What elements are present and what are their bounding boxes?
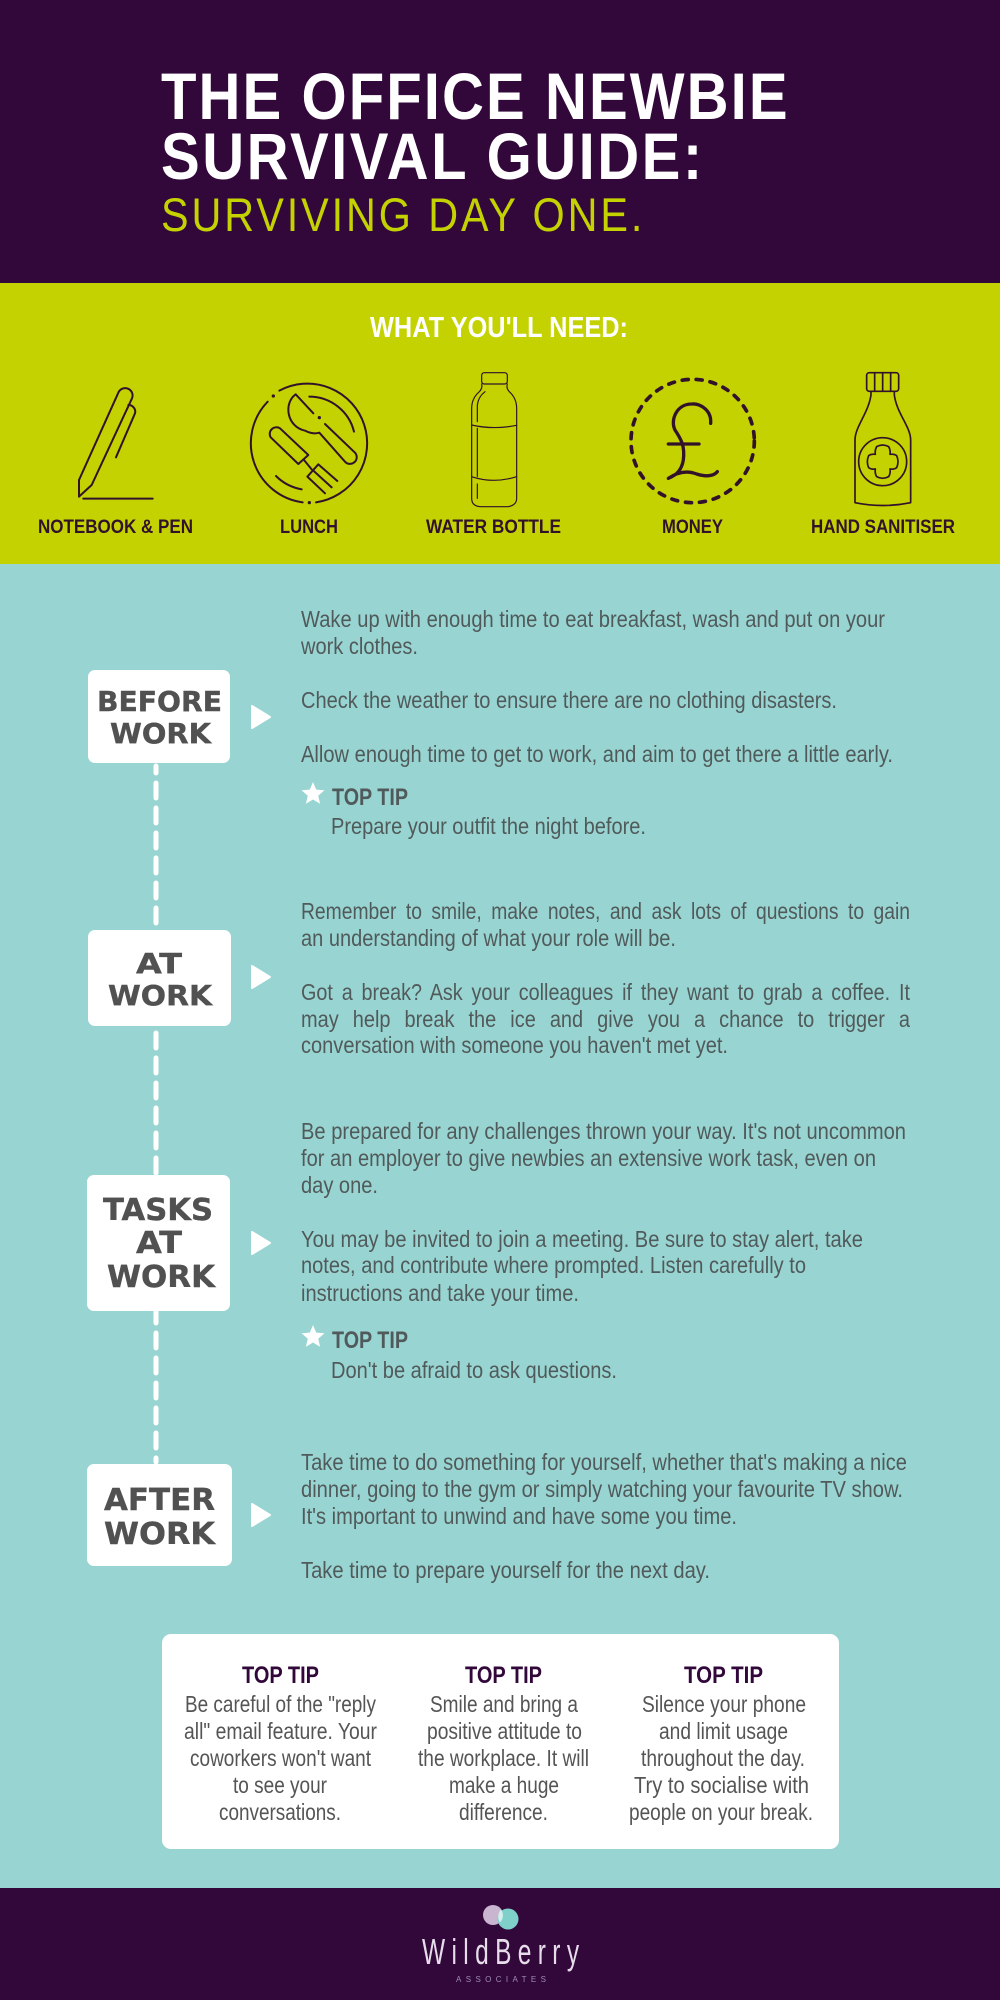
text: after work: Take time to prepare yourself for the next day. [301,1557,710,1583]
step: tasks at work: TASKS [103,1193,213,1228]
label: notebook and pen: NOTEBOOK & PEN [38,517,193,538]
tip column 3: TOP TIP [684,1662,763,1689]
step: after work: AFTER [104,1483,215,1518]
icon: logo circles [483,1905,518,1930]
tip column 3: people on your break. [629,1799,813,1825]
panel: top tips [162,1634,839,1849]
icon: water bottle [472,373,517,507]
icon: star [302,1325,324,1347]
text: tasks at work: notes, and contribute where prompted. Listen carefully to [301,1252,806,1278]
step: before work: WORK [110,717,212,750]
header band with title: THE OFFICE NEWBIE [161,61,788,134]
text: before work [300,606,893,767]
tip column 2: difference. [459,1799,548,1825]
text: tasks at work: for an employer to give newbies an extensive work task, even on [301,1145,876,1171]
tip column 3: and limit usage [659,1718,788,1744]
header band with title: SURVIVAL GUIDE: [161,121,702,194]
text: before work: work clothes. [300,633,418,659]
timeline connector [154,766,158,1462]
label: water bottle: WATER BOTTLE [426,517,561,538]
text: before work: Allow enough time to get to work, and aim to get there a little early. [301,741,893,767]
text: tasks at work: You may be invited to join a meeting. Be sure to stay alert, take [301,1226,863,1252]
step: at work: AT [136,947,182,980]
tip column 2: make a huge [449,1772,559,1798]
text: before work: Check the weather to ensure there are no clothing disasters. [301,687,837,713]
tip column 3 [629,1662,813,1825]
heading: what you'll need: WHAT YOU'LL NEED: [370,312,628,344]
arrow [252,966,270,988]
icon: star [302,782,324,804]
step: before work: BEFORE [97,685,222,718]
top tip: prepare outfit [302,782,646,839]
text: before work: Wake up with enough time to eat breakfast, wash and put on your [301,606,885,632]
icon: pen [79,388,153,499]
text: after work [301,1449,907,1583]
step: at work [88,930,270,1026]
step: tasks at work [87,1175,270,1311]
tip column 1: coworkers won't want [190,1745,371,1771]
step: at work: WORK [108,979,213,1012]
footer band with logo [0,1888,1000,2000]
step: tasks at work: WORK [107,1260,217,1295]
tip column 1: TOP TIP [242,1662,319,1689]
panel: what you'll need [0,283,1000,564]
tip column 2 [418,1662,589,1825]
label: lunch: LUNCH [280,517,338,538]
text: at work: an understanding of what your role will be. [301,925,676,951]
step: after work [87,1464,270,1566]
label: money: MONEY [662,517,723,538]
top tip: prepare outfit: Prepare your outfit the night before. [331,813,646,839]
top tip: ask questions [302,1325,617,1383]
top tip: prepare outfit: TOP TIP [332,784,408,811]
text: at work: may help break the ice and give you a chance to trigger a [301,1006,911,1032]
step: tasks at work: AT [136,1226,183,1261]
step: after work: WORK [104,1517,217,1552]
logo wordmark: WildBerry [422,1931,580,1972]
arrow [252,706,270,728]
top tip: ask questions: TOP TIP [332,1327,408,1354]
tip column 1: conversations. [219,1799,341,1825]
text: at work: conversation with someone you haven't met yet. [301,1032,728,1058]
text: tasks at work [301,1118,906,1306]
tip column 3: Try to socialise with [634,1772,809,1798]
tip column 2: TOP TIP [465,1662,542,1689]
tip column 1: Be careful of the "reply [185,1691,376,1717]
text: tasks at work: instructions and take your time. [301,1280,579,1306]
top tip: ask questions: Don't be afraid to ask questions. [331,1357,617,1383]
icon: hand sanitiser [855,373,911,505]
icon: money [631,379,754,503]
tip column 2: the workplace. It will [418,1745,589,1771]
text: after work: It's important to unwind and have some you time. [301,1503,737,1529]
tip column 1 [184,1662,377,1825]
tip column 2: Smile and bring a [430,1691,579,1717]
text: tasks at work: Be prepared for any challenges thrown your way. It's not uncommon [301,1118,906,1144]
text: tasks at work: day one. [301,1172,378,1198]
header band with title [0,0,1000,283]
text: after work: dinner, going to the gym or simply watching your favourite TV show. [301,1476,903,1502]
tip column 1: to see your [233,1772,327,1798]
footer band with logo: ASSOCIATES [456,1975,546,1984]
text: at work [301,898,911,1058]
label: hand sanitiser: HAND SANITISER [811,517,955,538]
tip column 2: positive attitude to [427,1718,582,1744]
tip column 1: all" email feature. Your [184,1718,377,1744]
header band with title: SURVIVING DAY ONE. [161,190,642,242]
arrow [252,1232,270,1254]
icon: lunch plate [251,384,367,503]
arrow [252,1504,270,1526]
tip column 3: throughout the day. [641,1745,805,1771]
text: after work: Take time to do something for yourself, whether that's making a nice [301,1449,907,1475]
tip column 3: Silence your phone [642,1691,806,1717]
step: before work [88,670,270,763]
